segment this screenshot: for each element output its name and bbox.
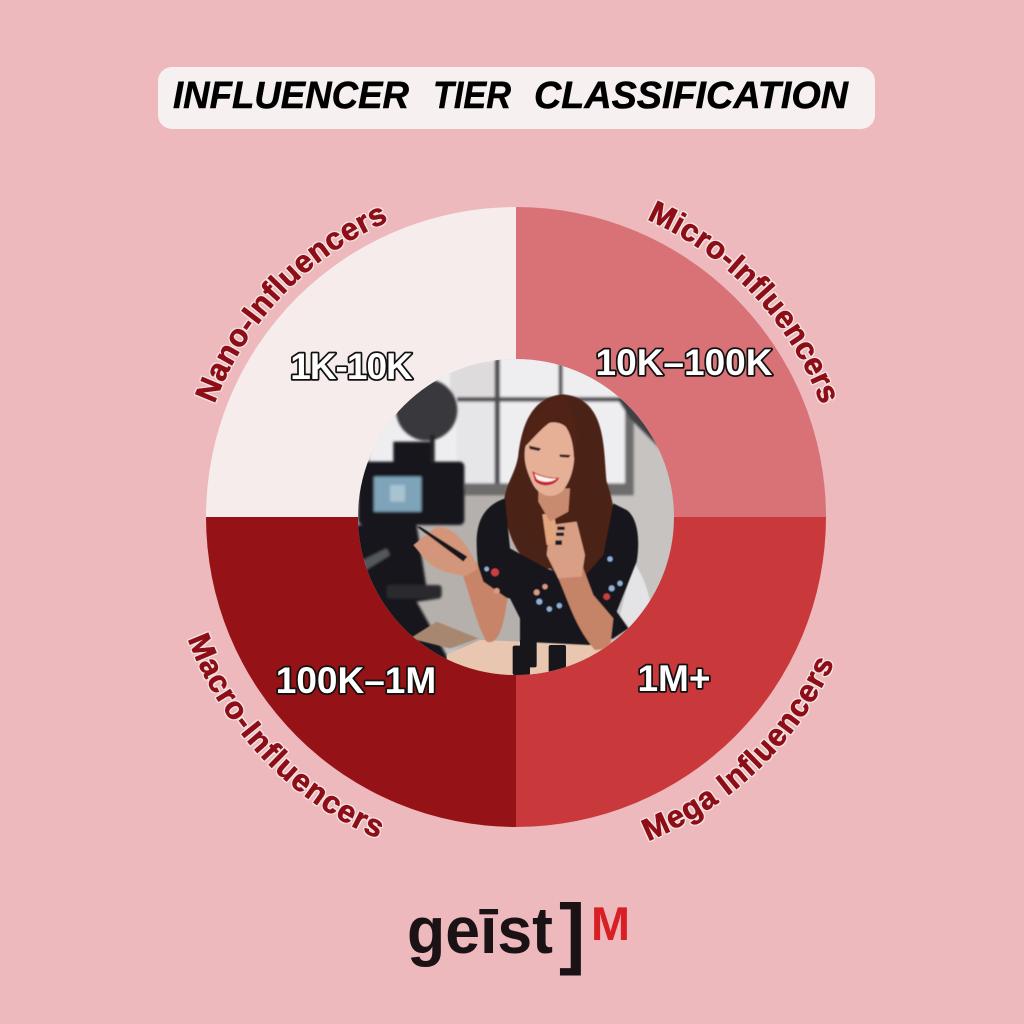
- donut chart: [206, 207, 826, 827]
- right arm: [557, 568, 613, 650]
- logo: geist M: M: [591, 897, 630, 950]
- value: 1K-10K: 1K-10K: [290, 346, 413, 387]
- right hand: [547, 522, 585, 578]
- eyes: [529, 446, 571, 458]
- table and palette: [446, 640, 608, 675]
- logo: geist M: ]: [559, 887, 585, 976]
- left arm: [462, 562, 507, 642]
- flowers on dress: [491, 568, 610, 600]
- logo: geist M: [407, 887, 630, 976]
- bottles: [513, 639, 566, 675]
- value: 10K-100K: 10K–100K: [596, 342, 773, 383]
- label: micro-influencers: Micro-Influencers: [647, 200, 836, 404]
- label: nano-influencers: Nano-Influencers: [194, 207, 388, 404]
- segment: nano: [206, 207, 516, 517]
- woman: [413, 394, 638, 650]
- left hand: [413, 527, 478, 576]
- segment: mega: [516, 517, 826, 827]
- title: [158, 67, 875, 129]
- hair back: [504, 394, 614, 584]
- segment: macro: [206, 517, 516, 827]
- mouth: [532, 471, 559, 485]
- segment: micro: [516, 207, 826, 517]
- camera: [358, 380, 466, 661]
- neck: [538, 488, 570, 522]
- face: [525, 422, 574, 496]
- dress: [477, 498, 638, 645]
- label: macro-influencers: Macro-Influencers: [187, 631, 383, 838]
- nails: [555, 527, 565, 545]
- chair: [620, 562, 650, 628]
- hair front: [525, 422, 576, 458]
- label: mega influencers: Mega Influencers: [640, 657, 834, 842]
- center photo: woman filming a makeup video: [350, 355, 680, 685]
- window: [370, 355, 680, 495]
- logo: geist M: geīst: [407, 893, 553, 967]
- title: INFLUENCER: [173, 75, 410, 117]
- value: 1M+: 1M+: [637, 658, 711, 699]
- title: TIER: [433, 75, 511, 117]
- brush: [417, 527, 467, 562]
- title: CLASSIFICATION: [534, 75, 850, 117]
- sponge: [542, 513, 558, 545]
- value: 100K-1M: 100K–1M: [276, 660, 436, 701]
